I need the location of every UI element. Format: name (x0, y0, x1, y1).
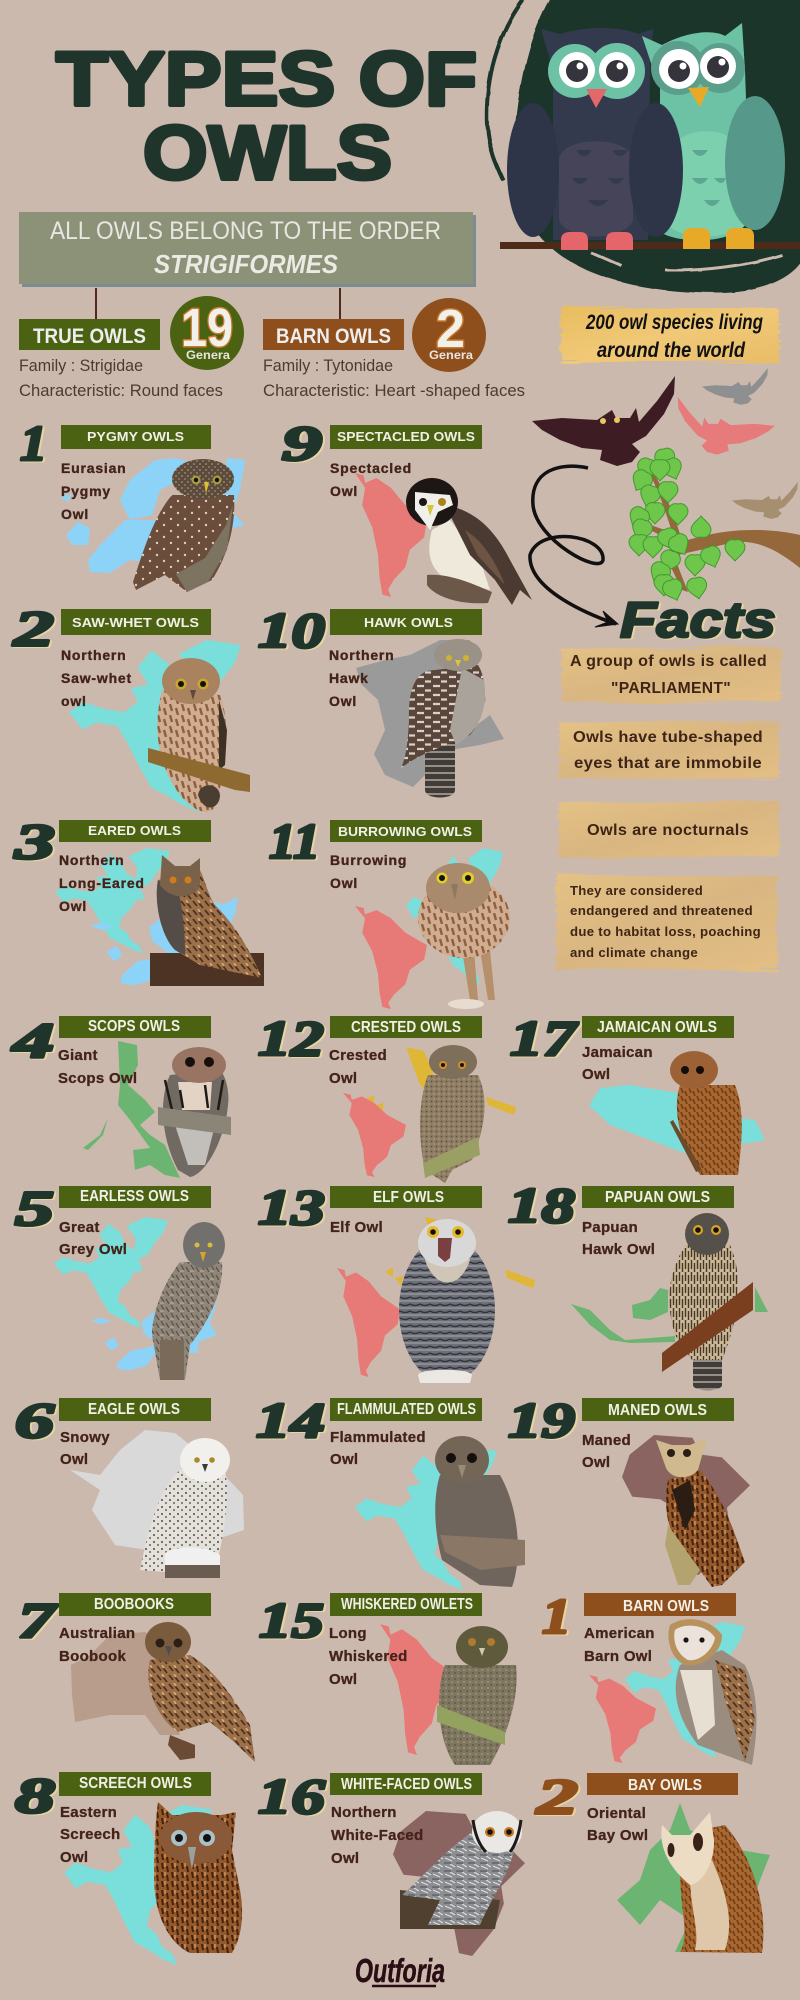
callout: 200 species: around the world (597, 339, 746, 362)
panel: 3 eared owls (13, 813, 264, 986)
icon: branch with leaves (624, 447, 800, 604)
species: Pygmy (61, 483, 111, 499)
owl: Australian boobook (145, 1622, 255, 1762)
heading bar: SPECTACLED OWLS (337, 429, 475, 444)
heading bar: JAMAICAN OWLS (597, 1019, 717, 1036)
species: Great (59, 1219, 100, 1236)
species: Eastern (60, 1804, 117, 1821)
species: Northern (59, 852, 125, 868)
heading bar: EAGLE OWLS (88, 1401, 180, 1418)
heading bar (582, 1186, 734, 1208)
fact: parliament: A group of owls is called (570, 653, 767, 670)
heading bar (59, 820, 211, 842)
panel: true owls family: Characteristic: Round faces (19, 381, 223, 400)
range map (337, 1217, 535, 1377)
owl: northern hawk (401, 639, 485, 798)
panel: 5 earless owls (15, 1180, 225, 1380)
heading bar: WHITE-FACED OWLS (341, 1776, 472, 1793)
fact: nocturnal (559, 802, 779, 857)
number: 9 (282, 415, 322, 471)
species: Eurasian (61, 460, 127, 476)
range map: Australia (71, 1632, 180, 1735)
heading bar: HAWK OWLS (364, 615, 453, 630)
number: 10 (258, 602, 325, 658)
heading bar (61, 425, 211, 449)
heading bar: FLAMMULATED OWLS (337, 1401, 476, 1418)
number: 17 (510, 1010, 579, 1066)
heading bar: BARN OWLS (623, 1598, 709, 1615)
range map (622, 1435, 750, 1575)
number: 2 (535, 1768, 578, 1824)
heading bar (330, 1186, 482, 1208)
panel: 2 saw-whet owls (12, 600, 250, 812)
species: Maned (582, 1432, 631, 1449)
logo: Outforia: Outforia (355, 1952, 445, 1989)
range map (380, 1624, 454, 1755)
species: Northern (329, 647, 395, 663)
panel: barn owls family (263, 288, 525, 400)
icon: flying owls (532, 368, 798, 519)
number: 7 (18, 1592, 58, 1648)
number: 16 (258, 1768, 325, 1824)
owl: crested (420, 1045, 485, 1183)
range map: Philippines (83, 1041, 180, 1178)
species: Owl (582, 1454, 610, 1471)
panel: 8 screech owls (15, 1767, 242, 1965)
range map (355, 473, 427, 597)
species: Burrowing (330, 852, 407, 868)
owl: elf (399, 1219, 495, 1383)
title: OWLS (143, 111, 392, 196)
owl: northern long-eared (150, 855, 264, 986)
banner: order Strigiformes: STRIGIFORMES (154, 249, 339, 279)
banner: order Strigiformes (19, 212, 476, 287)
species: owl (61, 693, 87, 709)
panel: 13 elf owls (258, 1179, 535, 1383)
owl: burrowing (418, 863, 510, 1009)
dark owl right wing (629, 103, 683, 237)
species: Flammulated (330, 1429, 426, 1446)
heading bar (59, 1593, 211, 1616)
panel: barn owls family: 2 (436, 299, 465, 359)
callout: 200 species: 200 owl species living (585, 311, 763, 334)
heading bar: BOOBOOKS (94, 1596, 174, 1613)
fact: endangered: endangered and threatened (570, 903, 753, 918)
fact: endangered (556, 875, 777, 970)
range map (589, 1622, 745, 1763)
banner: order Strigiformes: ALL OWLS BELONG TO THE ORDER (50, 217, 441, 245)
owl: Eurasian pygmy (133, 459, 234, 592)
panel: 18 papuan owls (508, 1177, 768, 1390)
panel: 19 maned owls (508, 1392, 750, 1587)
species: White-Faced (331, 1827, 423, 1844)
green owl (642, 23, 785, 240)
heading bar (59, 1398, 211, 1421)
panel: bay owl 2 (535, 1768, 770, 1953)
species: Northern (61, 647, 127, 663)
range map (60, 458, 245, 573)
species: Owl (60, 1451, 88, 1468)
species: Hawk Owl (582, 1241, 655, 1258)
range map (589, 1085, 765, 1155)
illustration: two cartoon owls on a branch (487, 0, 800, 293)
heading bar (330, 1398, 482, 1421)
dark owl (507, 28, 653, 240)
range map (355, 1447, 497, 1590)
panel: 17 jamaican owls (510, 1010, 765, 1175)
species: Owl (59, 898, 87, 914)
number: 3 (13, 813, 55, 869)
owl: jamaican (670, 1051, 742, 1175)
heading bar (330, 1773, 482, 1795)
heading bar (582, 1398, 734, 1421)
heading bar (330, 1016, 482, 1038)
panel: true owls family: Genera (186, 350, 231, 362)
light streaks in brush (590, 252, 782, 270)
fact: eyes: eyes that are immobile (574, 755, 762, 772)
heading bar (330, 609, 482, 635)
species: Owl (61, 506, 89, 522)
fact: eyes (559, 722, 779, 778)
fact: endangered: due to habitat loss, poaching (570, 924, 761, 939)
owl: oriental bay (661, 1812, 763, 1953)
heading bar: EARLESS OWLS (80, 1188, 189, 1205)
range map (617, 1803, 770, 1952)
heading bar: PAPUAN OWLS (605, 1189, 710, 1206)
heading bar (330, 1593, 482, 1616)
green owl feet (683, 228, 754, 249)
heading: facts: Facts (620, 592, 776, 648)
range map (69, 640, 241, 812)
panel: 1 pygmy owls (20, 415, 245, 592)
panel: 12 crested owls (258, 1010, 516, 1183)
heading bar: WHISKERED OWLETS (341, 1596, 473, 1613)
number: 1 (542, 1588, 571, 1644)
range map (571, 1287, 768, 1343)
panel: 10 hawk owls (258, 602, 504, 798)
branch (500, 242, 800, 249)
owl: giant scops (158, 1047, 231, 1177)
heading bar: SCREECH OWLS (79, 1775, 192, 1792)
heading bar: ELF OWLS (373, 1189, 444, 1206)
owl: long whiskered (437, 1626, 517, 1765)
owl: great grey (152, 1222, 225, 1380)
heading bar: EARED OWLS (88, 823, 181, 838)
callout: 200 species (561, 308, 779, 362)
panel: 16 white-faced owls (258, 1768, 525, 1956)
panel: 15 whiskered owlets (259, 1592, 517, 1765)
range map (54, 1217, 217, 1370)
panel: 4 scops owls (11, 1012, 231, 1178)
fact: eyes: Owls have tube-shaped (573, 729, 763, 746)
range map (393, 1811, 525, 1956)
panel: barn owl 1 (542, 1588, 756, 1765)
fact: endangered: and climate change (570, 945, 698, 960)
panel: 14 flammulated owls (256, 1392, 525, 1590)
species: Long-Eared (59, 875, 145, 891)
range map: Antarctica (70, 1430, 244, 1552)
number: 1 (20, 415, 47, 471)
arrow: swirl to facts (530, 466, 618, 627)
owl: flammulated (435, 1436, 525, 1587)
panel: 9 spectacled owls (282, 415, 532, 605)
species: Owl (329, 1070, 357, 1087)
owl: eastern screech (154, 1802, 242, 1953)
number: 13 (258, 1179, 325, 1235)
range map (343, 1047, 516, 1177)
owl: papuan hawk (662, 1213, 753, 1390)
heading bar (59, 1016, 211, 1038)
species: Owl (330, 1451, 358, 1468)
heading bar: BURROWING OWLS (338, 824, 472, 839)
owl: spectacled (406, 478, 532, 605)
title: TYPES OF (56, 37, 477, 122)
number: 14 (256, 1392, 325, 1448)
heading bar: BAY OWLS (628, 1777, 702, 1794)
species: Owl (60, 1849, 88, 1866)
number: 11 (269, 813, 320, 869)
panel: 11 burrowing owls (269, 813, 510, 1009)
panel: true owls family: Family : Strigidae (19, 356, 143, 375)
heading bar (59, 1772, 211, 1796)
number: 6 (15, 1392, 54, 1448)
owl: snowy (140, 1438, 230, 1578)
owl: American barn (668, 1619, 756, 1765)
owl: maned (656, 1438, 745, 1587)
species: Jamaican (582, 1044, 653, 1061)
species: Giant (58, 1047, 98, 1064)
panel: true owls family (19, 288, 244, 400)
heading bar (59, 1186, 211, 1208)
species: Owl (330, 875, 358, 891)
species: Bay Owl (587, 1827, 648, 1844)
species: Long (329, 1625, 367, 1642)
range map (356, 640, 504, 787)
fact: parliament: "PARLIAMENT" (611, 680, 731, 697)
number: 12 (258, 1010, 324, 1066)
panel: true owls family: TRUE OWLS (33, 325, 146, 348)
number: 8 (15, 1767, 55, 1823)
panel: barn owls family: BARN OWLS (276, 325, 391, 348)
species: Elf Owl (330, 1219, 383, 1236)
number: 19 (508, 1392, 575, 1448)
owl feet (561, 232, 633, 250)
species: Owl (329, 1671, 357, 1688)
species: American (584, 1625, 655, 1642)
species: Australian (59, 1625, 135, 1642)
heading bar (582, 1016, 734, 1038)
species: Scops Owl (58, 1070, 137, 1087)
number: 18 (508, 1177, 575, 1233)
number: 2 (12, 600, 54, 656)
species: Owl (582, 1066, 610, 1083)
heading bar: SCOPS OWLS (88, 1018, 180, 1035)
brush outline stroke (487, 0, 523, 180)
number: 4 (11, 1012, 54, 1068)
species: Owl (329, 693, 357, 709)
heading bar: MANED OWLS (608, 1402, 707, 1419)
species: Grey Owl (59, 1241, 127, 1258)
species: Spectacled (330, 460, 412, 476)
range map (355, 848, 503, 1009)
species: Barn Owl (584, 1648, 652, 1665)
heading bar (330, 820, 482, 842)
species: Owl (330, 483, 358, 499)
species: Whiskered (329, 1648, 408, 1665)
species: Papuan (582, 1219, 638, 1236)
species: Crested (329, 1047, 387, 1064)
heading bar: CRESTED OWLS (351, 1019, 461, 1036)
dark brush circle (512, 0, 800, 293)
species: Owl (331, 1850, 359, 1867)
number: 15 (259, 1592, 324, 1648)
panel: barn owls family: Characteristic: Heart -shaped faces (263, 381, 525, 400)
panel: barn owls family: Family : Tytonidae (263, 356, 393, 375)
heading bar: PYGMY OWLS (87, 429, 184, 444)
panel: true owls family: 19 (181, 298, 233, 358)
owl: northern saw-whet (148, 658, 250, 812)
species: Boobook (59, 1648, 126, 1665)
heading bar (587, 1773, 738, 1795)
panel: barn owls family: Genera (429, 350, 474, 362)
heading bar (61, 609, 211, 635)
species: Saw-whet (61, 670, 132, 686)
number: 5 (15, 1180, 54, 1236)
heading bar (330, 425, 482, 449)
range map (64, 1805, 212, 1965)
range map (55, 848, 238, 985)
species: Snowy (60, 1429, 110, 1446)
fact: endangered: They are considered (570, 883, 703, 898)
title (56, 37, 477, 196)
species: Oriental (587, 1805, 646, 1822)
owl: northern white-faced (400, 1811, 522, 1929)
species: Hawk (329, 670, 369, 686)
panel: 6 eagle owls (15, 1392, 244, 1578)
panel: 7 boobooks (18, 1592, 255, 1762)
fact: nocturnal: Owls are nocturnals (587, 822, 749, 839)
heading bar (584, 1593, 736, 1616)
heading bar: SAW-WHET OWLS (72, 615, 199, 630)
species: Screech (60, 1826, 120, 1843)
fact: parliament (561, 648, 781, 702)
species: Northern (331, 1804, 397, 1821)
